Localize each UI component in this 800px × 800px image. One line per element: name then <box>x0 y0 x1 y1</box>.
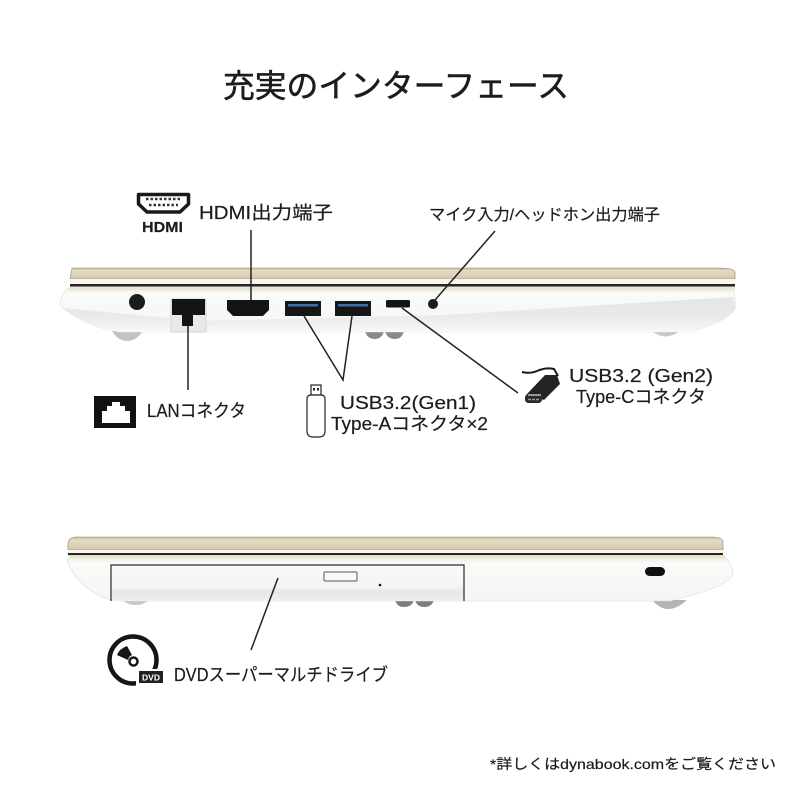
USB Type-A port 1 <box>285 301 321 316</box>
eject button <box>324 572 357 581</box>
laptop feet <box>112 331 680 341</box>
label: USB Type-A: Type-Aコネクタ×2 <box>331 414 488 434</box>
label: LAN: LANコネクタ <box>147 401 246 421</box>
icon: USB stick <box>307 385 325 437</box>
footnote: *詳しくはdynabook.comをご覧ください <box>490 756 776 772</box>
icon: LAN <box>94 396 136 428</box>
microphone leader line <box>435 231 495 300</box>
laptop base <box>67 557 733 601</box>
laptop base <box>61 288 735 332</box>
label: microphone/headphone: マイク入力/ヘッドホン出力端子 <box>429 206 660 224</box>
USB Type-A port 2 <box>335 301 371 316</box>
USB Type-A leader lines <box>304 316 352 380</box>
HDMI leader line <box>250 230 252 300</box>
USB Type-C leader line <box>402 308 518 393</box>
icon: HDMI <box>138 194 188 236</box>
security lock slot <box>645 567 665 576</box>
laptop lid <box>68 537 723 550</box>
icon: DVD disc: DVD <box>142 674 160 682</box>
LAN port <box>171 299 206 332</box>
label: USB Type-A <box>331 393 488 434</box>
laptop feet <box>122 600 687 609</box>
icon: DVD disc <box>110 636 165 686</box>
title: 充実のインターフェース <box>223 68 569 104</box>
label: USB Type-C: Type-Cコネクタ <box>576 387 706 407</box>
laptop: side view with ports <box>61 268 735 341</box>
power jack <box>129 294 145 310</box>
laptop lid <box>70 268 735 279</box>
label: DVD: DVDスーパーマルチドライブ <box>174 664 388 685</box>
label: USB Type-C: USB3.2 (Gen2) <box>569 366 713 386</box>
emergency eject hole <box>379 584 381 586</box>
microphone jack <box>428 299 438 309</box>
label: HDMI: HDMI出力端子 <box>199 203 333 223</box>
optical drive tray <box>111 565 464 601</box>
base shading <box>64 297 735 332</box>
laptop: side view with optical drive <box>67 537 733 609</box>
icon: USB Type-C plug <box>522 368 560 403</box>
icon: HDMI: HDMI <box>142 219 183 236</box>
HDMI port <box>227 300 269 316</box>
DVD leader line <box>251 578 278 650</box>
label: USB Type-A: USB3.2(Gen1) <box>340 393 476 413</box>
LAN leader line <box>187 326 189 390</box>
label: USB Type-C <box>569 366 713 407</box>
USB Type-C port <box>386 300 410 308</box>
